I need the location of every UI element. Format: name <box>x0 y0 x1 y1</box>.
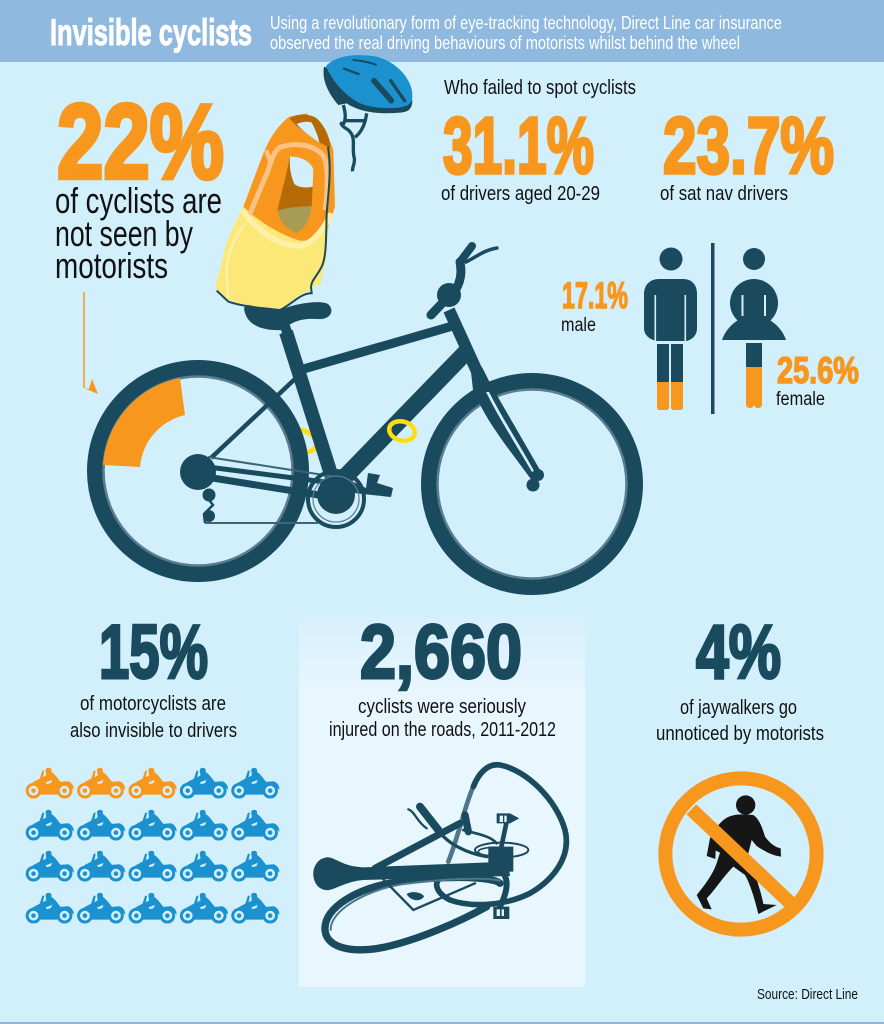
header band <box>0 0 884 62</box>
stat: 4% jaywalkers: 4% <box>696 610 781 695</box>
stat: 4% jaywalkers: of jaywalkers go <box>680 697 797 719</box>
front yellow band <box>387 418 417 444</box>
hi-vis vest <box>216 113 335 310</box>
frame <box>200 246 497 523</box>
seat post <box>280 312 288 335</box>
icon: female figure <box>722 248 786 408</box>
rear wheel <box>95 368 301 574</box>
stat: female: female <box>776 389 825 410</box>
stat: sat nav drivers: of sat nav drivers <box>660 183 788 205</box>
icon: crashed bicycle <box>313 765 566 950</box>
stat: male: male <box>561 315 596 336</box>
bicycle <box>95 246 635 587</box>
saddle <box>244 302 331 330</box>
handlebar <box>431 296 449 315</box>
who failed heading: Who failed to spot cyclists <box>444 77 636 99</box>
intro text: observed the real driving behaviours of motorists whilst behind the wheel <box>270 33 740 53</box>
derailleur <box>202 488 216 502</box>
stat: 4% jaywalkers <box>656 610 824 745</box>
stat: male: 17.1% <box>562 275 628 316</box>
intro text <box>270 13 782 53</box>
intro text: Using a revolutionary form of eye-tracking technology, Direct Line car insurance <box>270 13 782 33</box>
stat: 15% motorcyclists <box>70 610 237 742</box>
bottom bracket <box>317 476 355 514</box>
helmet <box>324 55 412 171</box>
stat: sat nav drivers <box>660 101 834 205</box>
divider <box>711 243 714 414</box>
stat: 22% headline: of cyclists are <box>55 180 222 221</box>
arrow to orange wheel sector <box>84 292 98 394</box>
title: Invisible cyclists <box>50 12 252 53</box>
fork <box>471 367 540 482</box>
orange 22% wheel sector <box>103 378 185 467</box>
stat: female <box>776 350 859 410</box>
stat: drivers aged 20-29: 31.1% <box>443 101 594 190</box>
stat: 2,660 injured: cyclists were seriously <box>358 696 526 718</box>
stat: 2,660 injured: injured on the roads, 2011-2012 <box>329 719 556 741</box>
stat: 22% headline <box>55 83 224 286</box>
icon grid: motorcycles <box>27 768 279 922</box>
stat: drivers aged 20-29 <box>441 101 600 205</box>
icon: no pedestrians sign <box>665 778 817 930</box>
chainring <box>308 471 364 527</box>
stat: 15% motorcyclists: 15% <box>99 610 208 695</box>
front wheel <box>429 381 635 587</box>
pedal <box>345 473 393 497</box>
head tube <box>449 310 480 378</box>
panel: seriously injured <box>299 618 585 987</box>
front axle <box>526 478 540 492</box>
stat: 2,660 injured <box>329 610 556 741</box>
icon: male figure <box>644 248 697 410</box>
stat: 15% motorcyclists: of motorcyclists are <box>80 693 226 715</box>
rear hub <box>180 454 216 490</box>
stat: 4% jaywalkers: unnoticed by motorists <box>656 723 824 745</box>
stat: 22% headline: motorists <box>55 245 168 286</box>
stat: male <box>561 275 628 336</box>
stat: 2,660 injured: 2,660 <box>360 610 522 695</box>
rear yellow band <box>286 426 320 456</box>
stat: 15% motorcyclists: also invisible to drivers <box>70 720 237 742</box>
stat: sat nav drivers: 23.7% <box>663 101 834 190</box>
stat: drivers aged 20-29: of drivers aged 20-29 <box>441 183 600 205</box>
source note: Source: Direct Line <box>757 986 858 1003</box>
stat: 22% headline: not seen by <box>55 213 193 254</box>
stat: female: 25.6% <box>777 350 859 391</box>
stat: 22% headline: 22% <box>57 83 224 201</box>
